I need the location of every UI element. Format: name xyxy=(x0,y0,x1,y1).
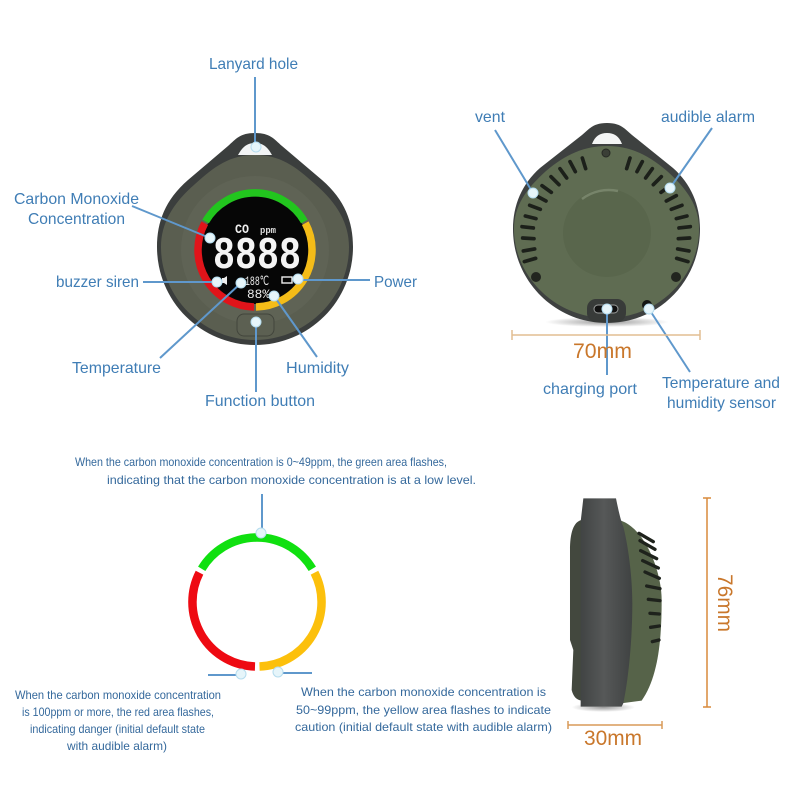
red level description: is 100ppm or more, the red area flashes, xyxy=(22,705,214,719)
screw left xyxy=(531,272,541,282)
device shell xyxy=(157,133,353,345)
rear device xyxy=(513,123,700,327)
marker dots xyxy=(205,142,675,679)
label: power: Power xyxy=(374,274,418,291)
ppm label: ppm xyxy=(260,226,277,236)
dimension: 70mm: 70mm xyxy=(573,340,632,363)
inner face xyxy=(181,176,329,324)
green arc xyxy=(206,193,304,222)
rear lanyard opening xyxy=(592,133,622,144)
front cap xyxy=(570,520,582,701)
red level description: When the carbon monoxide concentration xyxy=(15,688,221,702)
front device xyxy=(157,133,353,345)
dimension: 70mm xyxy=(512,330,700,363)
red ring segment xyxy=(192,573,255,666)
label: audible alarm: audible alarm xyxy=(661,109,755,126)
dimension: 30mm: 30mm xyxy=(584,727,642,750)
yellow level description: When the carbon monoxide concentration is xyxy=(301,685,546,699)
lanyard opening xyxy=(238,143,272,155)
leader lines xyxy=(132,77,712,675)
function button xyxy=(237,314,274,336)
green ring segment xyxy=(202,537,312,569)
side vent slots xyxy=(639,533,660,642)
yellow level description: caution (initial default state with audible alarm) xyxy=(295,720,552,734)
red arc xyxy=(198,223,254,307)
charging port xyxy=(594,305,618,313)
main digits: 8888 xyxy=(213,231,301,282)
olive faceplate xyxy=(161,155,349,340)
sensor hole xyxy=(642,300,652,310)
display xyxy=(201,196,309,304)
yellow level description xyxy=(295,685,552,734)
yellow level description: 50~99ppm, the yellow area flashes to indicate xyxy=(296,703,551,717)
label: function button: Function button xyxy=(205,393,315,410)
label: temperature and humidity sensor xyxy=(662,375,780,412)
side device xyxy=(570,498,662,712)
charging port housing xyxy=(587,299,626,322)
vent slots xyxy=(522,158,690,262)
label: buzzer siren: buzzer siren xyxy=(56,274,139,291)
label: vent: vent xyxy=(475,109,506,126)
yellow arc xyxy=(256,223,312,307)
label: temperature and humidity sensor: humidity sensor xyxy=(667,395,777,412)
red level description: indicating danger (initial default state xyxy=(30,722,205,736)
disc highlight xyxy=(582,190,618,199)
rear shadow xyxy=(545,317,669,327)
label: charging port: charging port xyxy=(543,381,638,398)
label: carbon monoxide concentration: Carbon Monoxide xyxy=(14,191,139,208)
top screw xyxy=(602,149,610,157)
label: lanyard hole: Lanyard hole xyxy=(209,56,298,73)
green level description xyxy=(75,455,476,487)
grey band xyxy=(581,498,632,707)
battery icon xyxy=(282,277,292,283)
label: carbon monoxide concentration xyxy=(14,191,139,228)
back cap xyxy=(621,521,662,703)
dimension: 30mm xyxy=(568,721,662,750)
label: temperature: Temperature xyxy=(72,360,161,377)
temperature readout: 188℃ xyxy=(245,274,269,289)
label: humidity: Humidity xyxy=(286,360,349,377)
label: carbon monoxide concentration: Concentration xyxy=(28,211,125,228)
green level description: When the carbon monoxide concentration is 0~49ppm, the green area flashes, xyxy=(75,455,447,469)
green level description: indicating that the carbon monoxide concentration is at a low level. xyxy=(107,473,476,487)
label: temperature and humidity sensor: Temperature and xyxy=(662,375,780,392)
side shadow xyxy=(572,703,635,712)
CO label: CO xyxy=(235,222,249,237)
screw right xyxy=(671,272,681,282)
rear shell xyxy=(513,123,700,323)
red level description: with audible alarm) xyxy=(66,739,167,753)
rear olive body xyxy=(514,146,699,318)
red level description xyxy=(15,688,221,753)
dimension: 76mm xyxy=(703,498,736,707)
dimension: 76mm: 76mm xyxy=(713,574,736,632)
ring diagram xyxy=(192,537,322,666)
speaker icon xyxy=(222,276,227,285)
rear center disc xyxy=(563,189,651,277)
yellow ring segment xyxy=(260,573,322,666)
humidity readout: 88% xyxy=(247,287,270,302)
